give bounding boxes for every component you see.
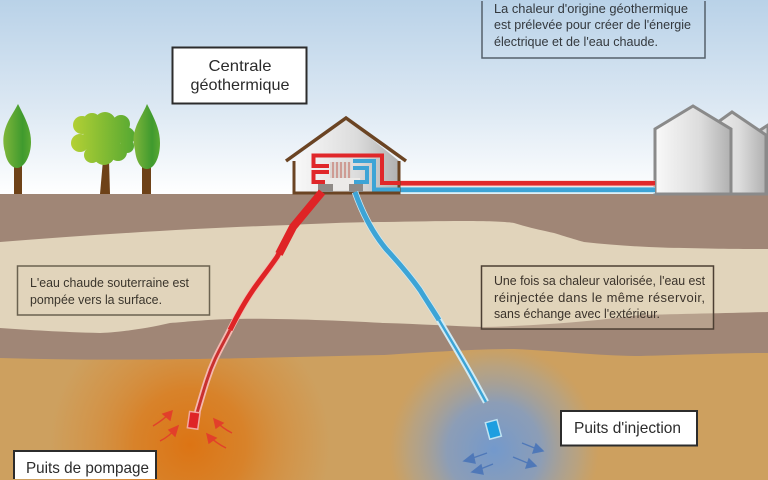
callout: heat extraction	[482, 1, 705, 58]
callout: hot water pumped up	[18, 266, 210, 315]
callout: water reinjected	[482, 266, 714, 329]
callout: centrale géothermique: Centrale	[208, 58, 272, 75]
label: puits d'injection	[561, 411, 697, 446]
callout: heat extraction: est prélevée pour créer de l'énergie	[494, 17, 691, 32]
callout: hot water pumped up: pompée vers la surface.	[30, 292, 162, 307]
silo: far right	[745, 125, 768, 194]
pumping well: red pipe	[197, 192, 322, 413]
label: puits d'injection: Puits d'injection	[574, 420, 681, 437]
silo: left	[655, 106, 731, 194]
geothermal plant building	[286, 118, 406, 194]
callout: water reinjected: sans échange avec l'extérieur.	[494, 306, 660, 321]
tree: right	[134, 104, 160, 194]
cold circuit	[353, 161, 400, 190]
pumping well: pump head	[187, 411, 200, 429]
callout: water reinjected: Une fois sa chaleur valorisée, l'eau est	[494, 273, 705, 288]
callout: centrale géothermique	[172, 48, 306, 104]
label: puits de pompage	[14, 451, 156, 479]
callout: water reinjected: réinjectée dans le même réservoir,	[494, 290, 705, 305]
pump heads	[318, 184, 363, 192]
ground layer: cream aquifer band	[0, 221, 768, 333]
callout: centrale géothermique: géothermique	[190, 77, 290, 94]
arrows: heat flowing to pump	[153, 411, 232, 448]
hot circuit	[314, 156, 400, 183]
tree: left	[3, 104, 31, 194]
radiator	[322, 162, 360, 190]
ground layer: orange reservoir	[0, 349, 768, 480]
heat glow: pumping well	[66, 358, 314, 480]
surface pipes to silos	[398, 180, 655, 194]
callout: hot water pumped up: L'eau chaude souterraine est	[30, 275, 189, 290]
callout: heat extraction: La chaleur d'origine géothermique	[494, 1, 688, 16]
injection well: blue pipe	[355, 192, 486, 402]
arrows: water leaving injection well	[464, 443, 543, 474]
label: puits de pompage: Puits de pompage	[26, 460, 149, 477]
sky background	[0, 0, 768, 195]
silo: middle	[700, 112, 766, 194]
tree: round centre	[71, 112, 135, 194]
callout: heat extraction: électrique et de l'eau chaude.	[494, 34, 658, 49]
injection well: pump head	[485, 420, 501, 439]
ground layer: brown soil	[0, 194, 768, 480]
cold glow: injection well	[396, 352, 592, 480]
